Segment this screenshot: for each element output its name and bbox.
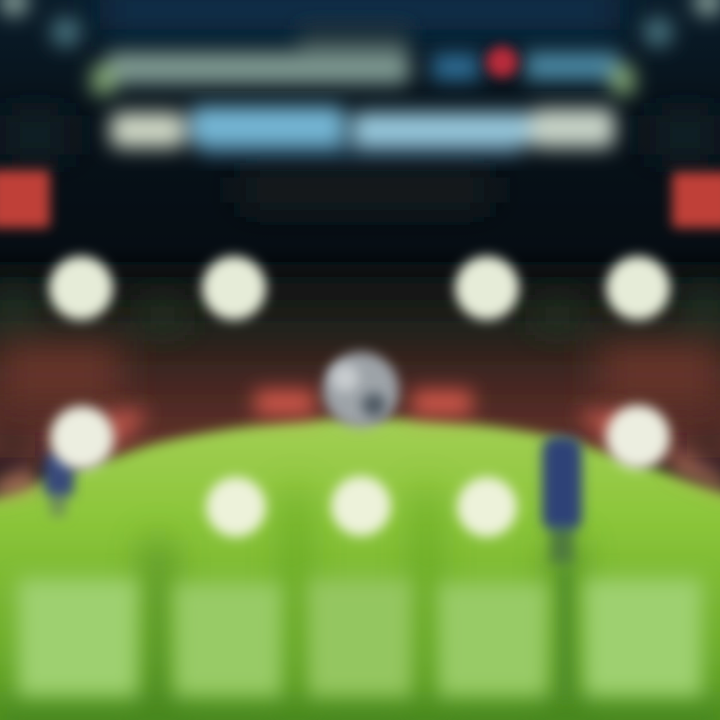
icon: circle right <box>606 405 670 469</box>
pitch <box>0 418 720 720</box>
panel: 2 <box>174 582 282 696</box>
pitch edge advertising <box>0 390 720 498</box>
bottom panels <box>18 578 702 696</box>
player: left <box>44 452 74 516</box>
player: right <box>542 436 582 700</box>
side panels <box>0 170 720 228</box>
icon: circle 2 <box>202 256 266 320</box>
side icon circles <box>50 405 670 470</box>
title banner <box>92 26 634 94</box>
pitch stripes <box>0 490 720 720</box>
crowd stands <box>0 265 720 465</box>
title line two <box>110 106 615 156</box>
icon: football <box>323 352 399 428</box>
icon: circle 4 <box>606 256 670 320</box>
roof glow <box>0 0 720 205</box>
panel: 1 <box>18 578 138 696</box>
upper row of icons <box>49 256 670 320</box>
icon: circle 7 <box>457 477 517 537</box>
panel: 4 <box>438 582 548 696</box>
title line one <box>92 26 634 94</box>
icon: circle 5 <box>206 477 266 537</box>
panel: 5 <box>584 578 702 696</box>
lower row of icons <box>206 476 517 537</box>
panel: right red sign <box>672 172 720 228</box>
icon: circle 1 <box>49 256 113 320</box>
icon: circle 3 <box>455 256 519 320</box>
title accent: red badge <box>486 46 518 78</box>
panel: left red sign <box>0 170 50 228</box>
panel: 3 <box>308 578 412 696</box>
crowd side tint <box>0 295 720 460</box>
icon: circle left <box>50 406 114 470</box>
icon: circle 6 <box>331 476 391 536</box>
corner lights <box>0 0 720 47</box>
